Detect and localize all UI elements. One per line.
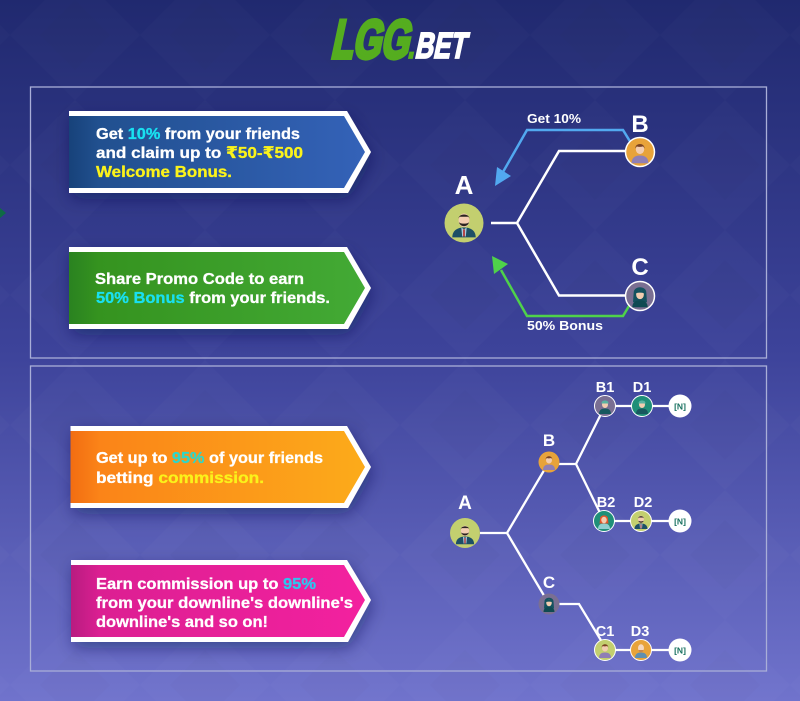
banner: downline commission: Earn commission up to 95%	[96, 576, 316, 593]
logo: .BET	[405, 25, 472, 66]
node: N top: [N]	[674, 402, 686, 412]
label: C: C	[631, 254, 649, 281]
label: B1: B1	[596, 380, 614, 396]
avatar: D2	[630, 510, 652, 532]
label: B: B	[543, 431, 555, 450]
label: B: B	[631, 111, 649, 138]
banner: downline commission: from your downline's downline's	[96, 595, 353, 612]
avatar: D3	[630, 640, 652, 660]
avatar: C1	[594, 640, 616, 660]
node: N bottom	[668, 638, 692, 662]
label: D3: D3	[631, 624, 649, 640]
label: B2: B2	[597, 495, 615, 511]
banner: betting commission: betting commission.	[96, 470, 264, 487]
arrow: 50% bonus	[492, 256, 629, 316]
banner: share promo code	[69, 247, 371, 329]
diagram: multi-level tree	[450, 380, 692, 662]
label: D2: D2	[634, 495, 652, 511]
label: D1: D1	[633, 380, 651, 396]
label: A: A	[458, 493, 472, 514]
avatar: A	[444, 204, 484, 242]
avatar: D1	[632, 396, 652, 416]
avatar: A	[450, 518, 480, 548]
panel: bottom frame	[30, 366, 766, 671]
node: N middle	[668, 510, 692, 532]
avatar: B	[538, 452, 560, 472]
node: N top	[668, 394, 692, 418]
avatar: C	[538, 594, 560, 614]
banner: get 10%	[69, 111, 371, 193]
connector lines	[480, 406, 680, 650]
label: get 10%: Get 10%	[527, 112, 581, 126]
node: N middle: [N]	[674, 516, 686, 526]
diagram: referral tree	[444, 111, 654, 333]
connector lines	[491, 151, 625, 296]
small arrow at left edge	[0, 208, 6, 218]
panel: top frame	[30, 87, 766, 358]
banner: get 10%: Get 10% from your friends	[96, 126, 300, 143]
banner: share promo code: 50% Bonus from your friends.	[96, 290, 330, 307]
label: 50% bonus: 50% Bonus	[527, 319, 603, 333]
logo	[327, 10, 472, 70]
banner: get 10%: Welcome Bonus.	[96, 164, 232, 181]
banner: betting commission: Get up to 95% of your friends	[96, 450, 323, 467]
node: N bottom: [N]	[674, 646, 686, 656]
banner: betting commission	[70, 426, 371, 508]
label: C: C	[543, 573, 555, 592]
banner: downline commission	[71, 560, 371, 642]
banner: share promo code: Share Promo Code to earn	[95, 271, 304, 288]
logo: LGG	[327, 10, 418, 70]
banner: downline commission: downline's and so on!	[96, 614, 268, 631]
banner: get 10%: and claim up to ₹50-₹500	[96, 145, 303, 162]
avatar: C	[626, 282, 654, 310]
arrow: get 10%	[495, 130, 631, 186]
avatar: B	[626, 138, 654, 166]
label: A: A	[455, 170, 474, 200]
avatar: B2	[594, 510, 614, 532]
avatar: B1	[594, 396, 616, 416]
label: C1: C1	[596, 624, 614, 640]
